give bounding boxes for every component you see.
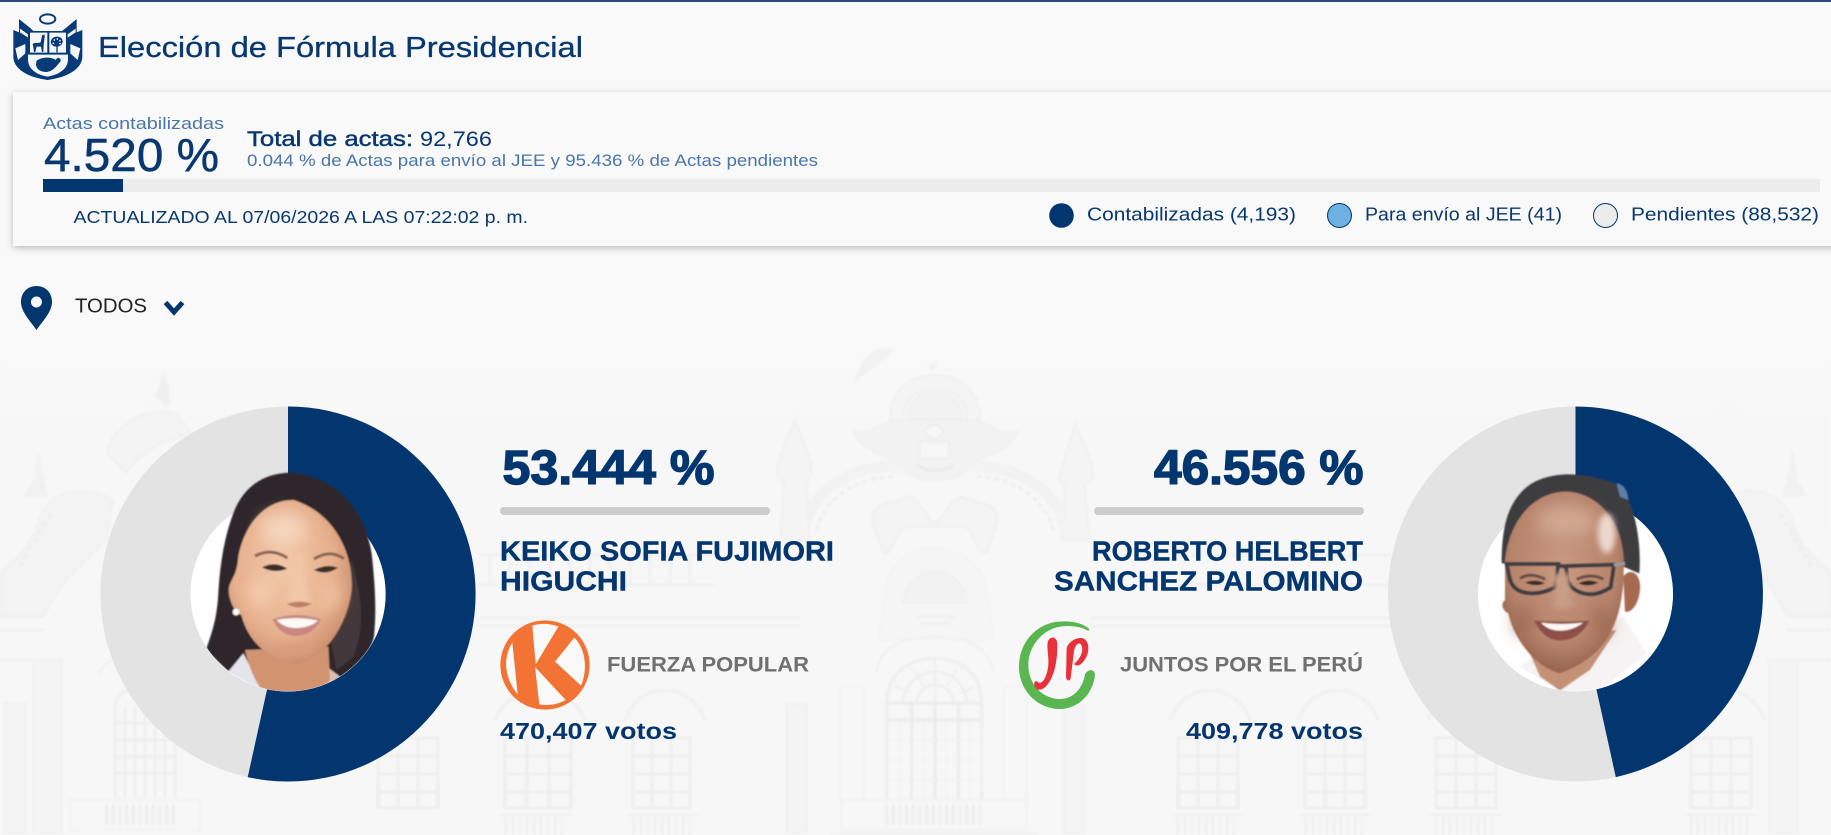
candidate name: SANCHEZ PALOMINO — [1054, 566, 1363, 596]
donut chart: Roberto Sanchez — [1388, 406, 1763, 782]
divider bar — [1094, 507, 1364, 515]
candidate name — [1054, 536, 1363, 596]
logo: Fuerza Popular — [500, 620, 590, 710]
total de actas: 92,766 — [420, 127, 492, 151]
legend — [1049, 203, 1819, 228]
party name: JUNTOS POR EL PERÚ — [1120, 652, 1363, 676]
logo: Juntos por el Perú — [1019, 621, 1095, 709]
percentage: 53.444 % — [502, 442, 714, 495]
big percentage: 4.520 % — [44, 129, 219, 181]
icon: chevron down — [166, 302, 182, 312]
panel: actas summary — [13, 92, 1831, 246]
subtitle: 0.044 % de Actas para envío al JEE y 95.436 % de Actas pendientes — [247, 152, 818, 170]
filter label: TODOS — [75, 296, 147, 318]
vote count: 470,407 votos — [500, 718, 677, 744]
progress bar — [43, 179, 1820, 192]
photo: Roberto Sanchez — [1502, 474, 1647, 691]
candidate name: ROBERTO HELBERT — [1092, 536, 1363, 566]
divider bar — [500, 507, 770, 515]
candidate block: Keiko Fujimori — [500, 442, 834, 744]
donut chart: Keiko Fujimori — [100, 406, 476, 782]
panel background — [13, 92, 1831, 246]
update timestamp: ACTUALIZADO AL 07/06/2026 A LAS 07:22:02 p. m. — [74, 207, 528, 227]
candidate name — [500, 536, 834, 596]
total de actas: Total de actas: — [247, 127, 413, 151]
party name: FUERZA POPULAR — [607, 654, 809, 676]
legend: Pendientes (88,532) — [1631, 204, 1819, 224]
legend: Contabilizadas (4,193) — [1087, 204, 1296, 224]
icon: location pin — [21, 286, 52, 330]
watermark: government palace — [0, 345, 1831, 835]
candidate name: KEIKO SOFIA FUJIMORI — [500, 536, 834, 566]
percentage: 46.556 % — [1154, 442, 1364, 495]
header: national emblem — [13, 14, 82, 80]
label: actas contabilizadas: Actas contabilizadas — [43, 114, 224, 133]
candidate name: HIGUCHI — [500, 566, 627, 596]
photo: Keiko Fujimori — [206, 473, 375, 692]
top navy rule — [0, 0, 1831, 2]
candidate block: Roberto Sanchez — [1019, 442, 1364, 744]
legend: Para envío al JEE (41) — [1365, 204, 1562, 224]
total de actas — [247, 127, 492, 151]
vote count: 409,778 votos — [1186, 718, 1363, 744]
title: Elección de Fórmula Presidencial — [98, 32, 583, 64]
